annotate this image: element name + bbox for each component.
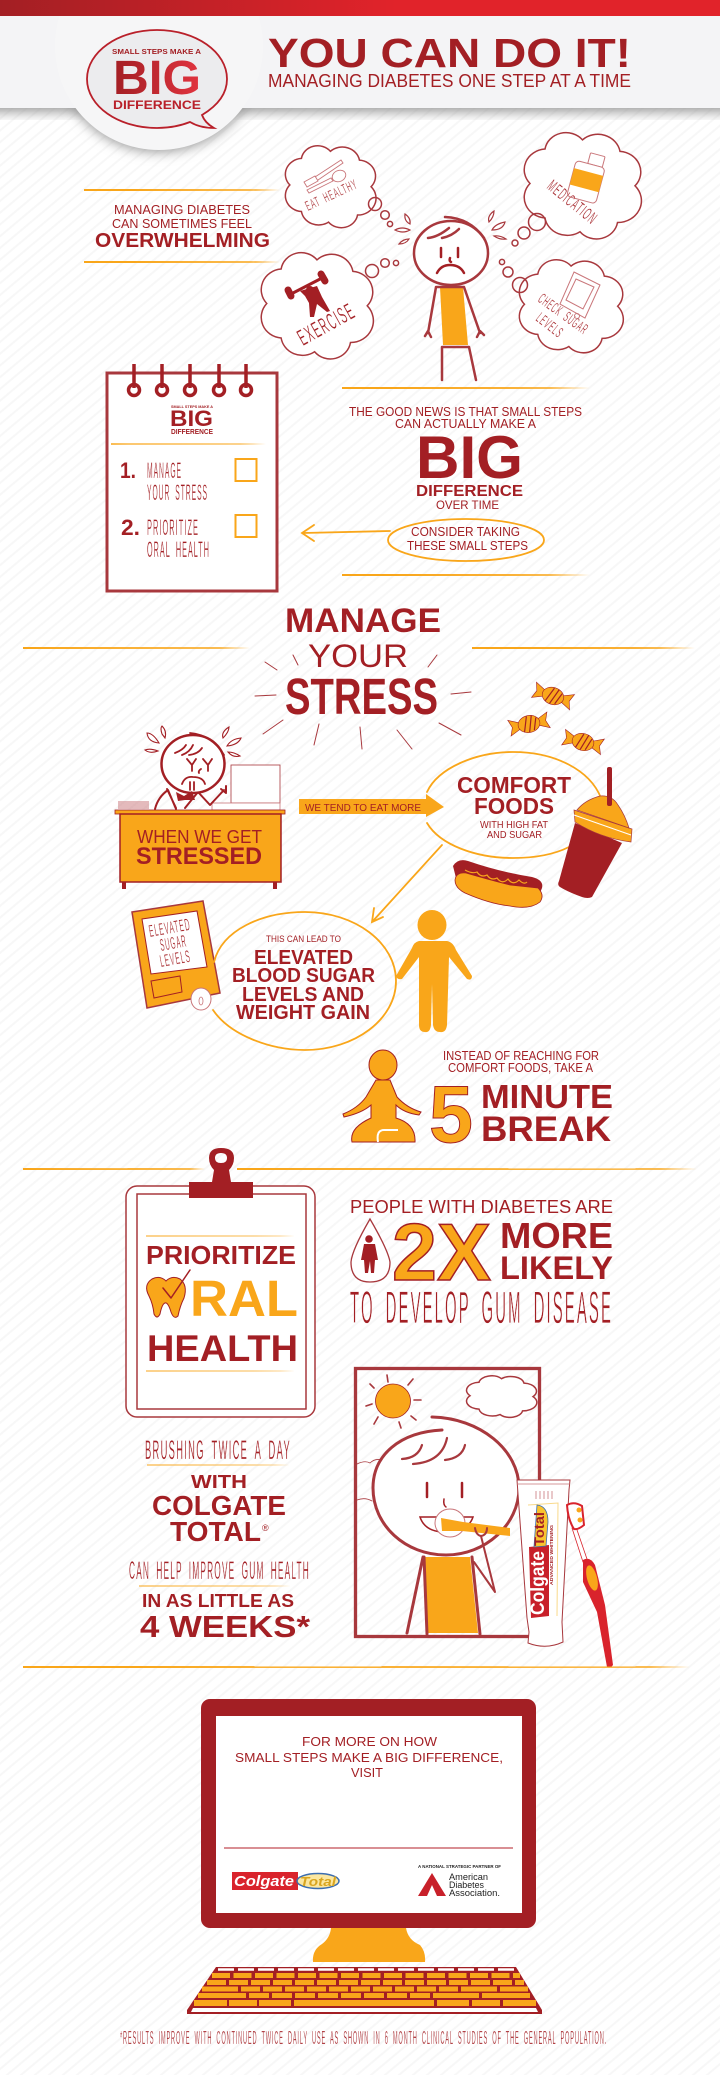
logo speech bubble: SMALL STEPS MAKE A xyxy=(112,47,202,56)
computer monitor: VISIT xyxy=(351,1765,383,1780)
comfort foods bubble: FOODS xyxy=(474,793,554,819)
title: YOU CAN DO IT! xyxy=(268,30,631,76)
icon: hot dog xyxy=(453,860,542,907)
logo: Colgate Total: Total xyxy=(300,1874,336,1889)
icon: meditating person xyxy=(343,1050,421,1142)
five minute break text xyxy=(429,1049,613,1160)
thought cloud: exercise: EXERCISE xyxy=(293,298,360,350)
five minute break text: BREAK xyxy=(481,1110,611,1149)
good news text block: CAN ACTUALLY MAKE A xyxy=(395,416,536,431)
person brushing teeth xyxy=(373,1417,519,1634)
logo: American Diabetes Association: American xyxy=(449,1872,488,1882)
toothbrush xyxy=(567,1503,613,1668)
brushing text block: WITH xyxy=(191,1471,247,1492)
icon: glucose tablet: SUGAR xyxy=(158,932,188,955)
heading: manage your stress: MANAGE xyxy=(285,602,441,640)
toothpaste tube: Total xyxy=(531,1512,547,1546)
thought cloud: medication: MEDICATION xyxy=(543,176,601,228)
brushing text block: TOTAL xyxy=(170,1516,261,1547)
thought cloud: medication xyxy=(512,133,641,246)
logo: American Diabetes Association: Diabetes xyxy=(449,1880,484,1890)
comfort foods bubble: COMFORT xyxy=(457,772,571,798)
diagonal arrow xyxy=(372,845,442,922)
brushing text block: COLGATE xyxy=(152,1490,286,1521)
arrow: we tend to eat more: WE TEND TO EAT MORE xyxy=(305,802,421,814)
heading: manage your stress: STRESS xyxy=(285,668,438,725)
logo: American Diabetes Association: Association. xyxy=(449,1888,500,1898)
thought cloud: eat healthy xyxy=(285,146,393,228)
thought cloud: eat healthy: EAT HEALTHY xyxy=(303,176,360,214)
overwhelming text block: CAN SOMETIMES FEEL xyxy=(112,216,252,231)
notepad checklist: PRIORITIZE xyxy=(147,515,199,540)
clipboard: prioritize oral health: RAL xyxy=(190,1270,298,1327)
five minute break text: MINUTE xyxy=(481,1078,613,1115)
good news text block: THE GOOD NEWS IS THAT SMALL STEPS xyxy=(349,404,582,419)
icon: drink cup xyxy=(558,767,632,898)
heading: manage your stress: YOUR xyxy=(308,638,408,674)
computer monitor xyxy=(201,1699,536,1928)
clipboard clip xyxy=(189,1148,253,1198)
good news text block: THESE SMALL STEPS xyxy=(407,538,528,553)
notepad checklist xyxy=(107,364,277,591)
elevated blood sugar bubble xyxy=(213,912,396,1050)
icon: glucose tablet: LEVELS xyxy=(158,947,192,971)
logo: Colgate Total xyxy=(232,1872,339,1890)
subtitle: MANAGING DIABETES ONE STEP AT A TIME xyxy=(268,71,631,91)
brushing illustration window xyxy=(356,1368,540,1636)
stressed man at desk xyxy=(115,726,285,889)
icon: orange person standing xyxy=(396,910,472,1032)
toothpaste tube: ADVANCED WHITENING xyxy=(549,1524,554,1585)
elevated blood sugar bubble: THIS CAN LEAD TO xyxy=(266,934,341,945)
icon: sun xyxy=(366,1375,421,1428)
icon: glucose tablet xyxy=(132,901,220,1010)
good news text block: BIG xyxy=(416,424,523,491)
five minute break text: 5 xyxy=(429,1070,473,1160)
notepad checklist: SMALL STEPS MAKE A xyxy=(171,405,213,409)
elevated blood sugar bubble: WEIGHT GAIN xyxy=(236,1002,370,1024)
notepad spiral rings xyxy=(128,364,252,396)
toothpaste tube: Colgate xyxy=(528,1551,549,1615)
brushing text block xyxy=(129,1435,311,1644)
clipboard: prioritize oral health xyxy=(126,1148,315,1417)
overwhelmed stick figure xyxy=(395,211,506,380)
clipboard: prioritize oral health: PRIORITIZE xyxy=(146,1240,296,1270)
text: CAN HELP IMPROVE GUM HEALTH xyxy=(129,1557,310,1585)
text: BRUSHING TWICE A DAY xyxy=(145,1435,291,1465)
logo speech bubble: BIG xyxy=(113,52,201,105)
overwhelming text block: OVERWHELMING xyxy=(95,230,270,252)
thought cloud: check sugar levels xyxy=(499,259,623,353)
five minute break text: COMFORT FOODS, TAKE A xyxy=(448,1061,594,1075)
logo: American Diabetes Association xyxy=(418,1864,501,1898)
keyboard xyxy=(187,1967,542,2014)
comfort foods bubble: WITH HIGH FAT xyxy=(480,820,548,831)
monitor stand xyxy=(313,1928,425,1962)
logo speech bubble xyxy=(87,30,227,128)
candies xyxy=(508,682,604,755)
arrow to notepad xyxy=(302,525,390,541)
good news text block: DIFFERENCE xyxy=(416,483,523,500)
overwhelming text block: MANAGING DIABETES xyxy=(114,202,250,217)
notepad checklist: DIFFERENCE xyxy=(171,429,213,436)
icon: glucose tablet: ELEVATED xyxy=(147,915,192,941)
elevated blood sugar bubble: ELEVATED xyxy=(254,947,353,969)
logo: Colgate Total: Colgate xyxy=(234,1873,294,1890)
notepad checklist: YOUR STRESS xyxy=(147,480,208,505)
elevated blood sugar bubble: BLOOD SUGAR xyxy=(232,965,376,987)
comfort foods bubble: AND SUGAR xyxy=(487,830,542,841)
brushing text block: IN AS LITTLE AS xyxy=(142,1590,294,1611)
stress burst rays xyxy=(255,655,471,749)
stat: 2x more likely: MORE xyxy=(500,1215,613,1256)
logo: American Diabetes Association: A NATIONAL STRATEGIC PARTNER OF xyxy=(418,1864,501,1869)
good news text block: CONSIDER TAKING xyxy=(411,524,520,539)
comfort foods bubble xyxy=(427,752,601,858)
stat: 2x more likely: LIKELY xyxy=(500,1250,613,1286)
notepad checklist: ORAL HEALTH xyxy=(147,537,210,562)
overwhelming text block xyxy=(84,189,280,263)
computer monitor: FOR MORE ON HOW xyxy=(302,1734,438,1749)
elevated blood sugar bubble: LEVELS AND xyxy=(242,984,364,1006)
notepad checklist: BIG xyxy=(170,406,213,431)
stat: 2x more likely xyxy=(350,1197,613,1333)
notepad checklist: 1. xyxy=(120,458,136,483)
good news text block xyxy=(342,387,590,576)
notepad checklist: MANAGE xyxy=(147,458,182,483)
header band xyxy=(0,0,720,152)
good news text block: OVER TIME xyxy=(436,498,499,512)
stressed man at desk: WHEN WE GET xyxy=(137,827,262,847)
arrow: we tend to eat more xyxy=(299,794,444,817)
notepad checklist: 2. xyxy=(121,515,140,540)
brushing text block: ® xyxy=(262,1523,269,1533)
brushing text block: 4 WEEKS* xyxy=(140,1609,311,1644)
thought cloud: check sugar levels: CHECK SUGAR xyxy=(535,290,592,338)
stat: 2x more likely: 2X xyxy=(392,1208,491,1298)
thought cloud: check sugar levels: LEVELS xyxy=(533,310,567,342)
logo speech bubble: DIFFERENCE xyxy=(113,100,201,112)
thought cloud: exercise xyxy=(261,253,399,359)
toothpaste tube xyxy=(517,1480,570,1646)
heading: manage your stress xyxy=(285,602,441,725)
stressed man at desk: STRESSED xyxy=(136,843,262,870)
five minute break text: INSTEAD OF REACHING FOR xyxy=(443,1049,599,1063)
stat: 2x more likely: PEOPLE WITH DIABETES ARE xyxy=(350,1197,613,1217)
computer monitor: SMALL STEPS MAKE A BIG DIFFERENCE, xyxy=(235,1750,503,1765)
clipboard: prioritize oral health: HEALTH xyxy=(147,1328,298,1369)
